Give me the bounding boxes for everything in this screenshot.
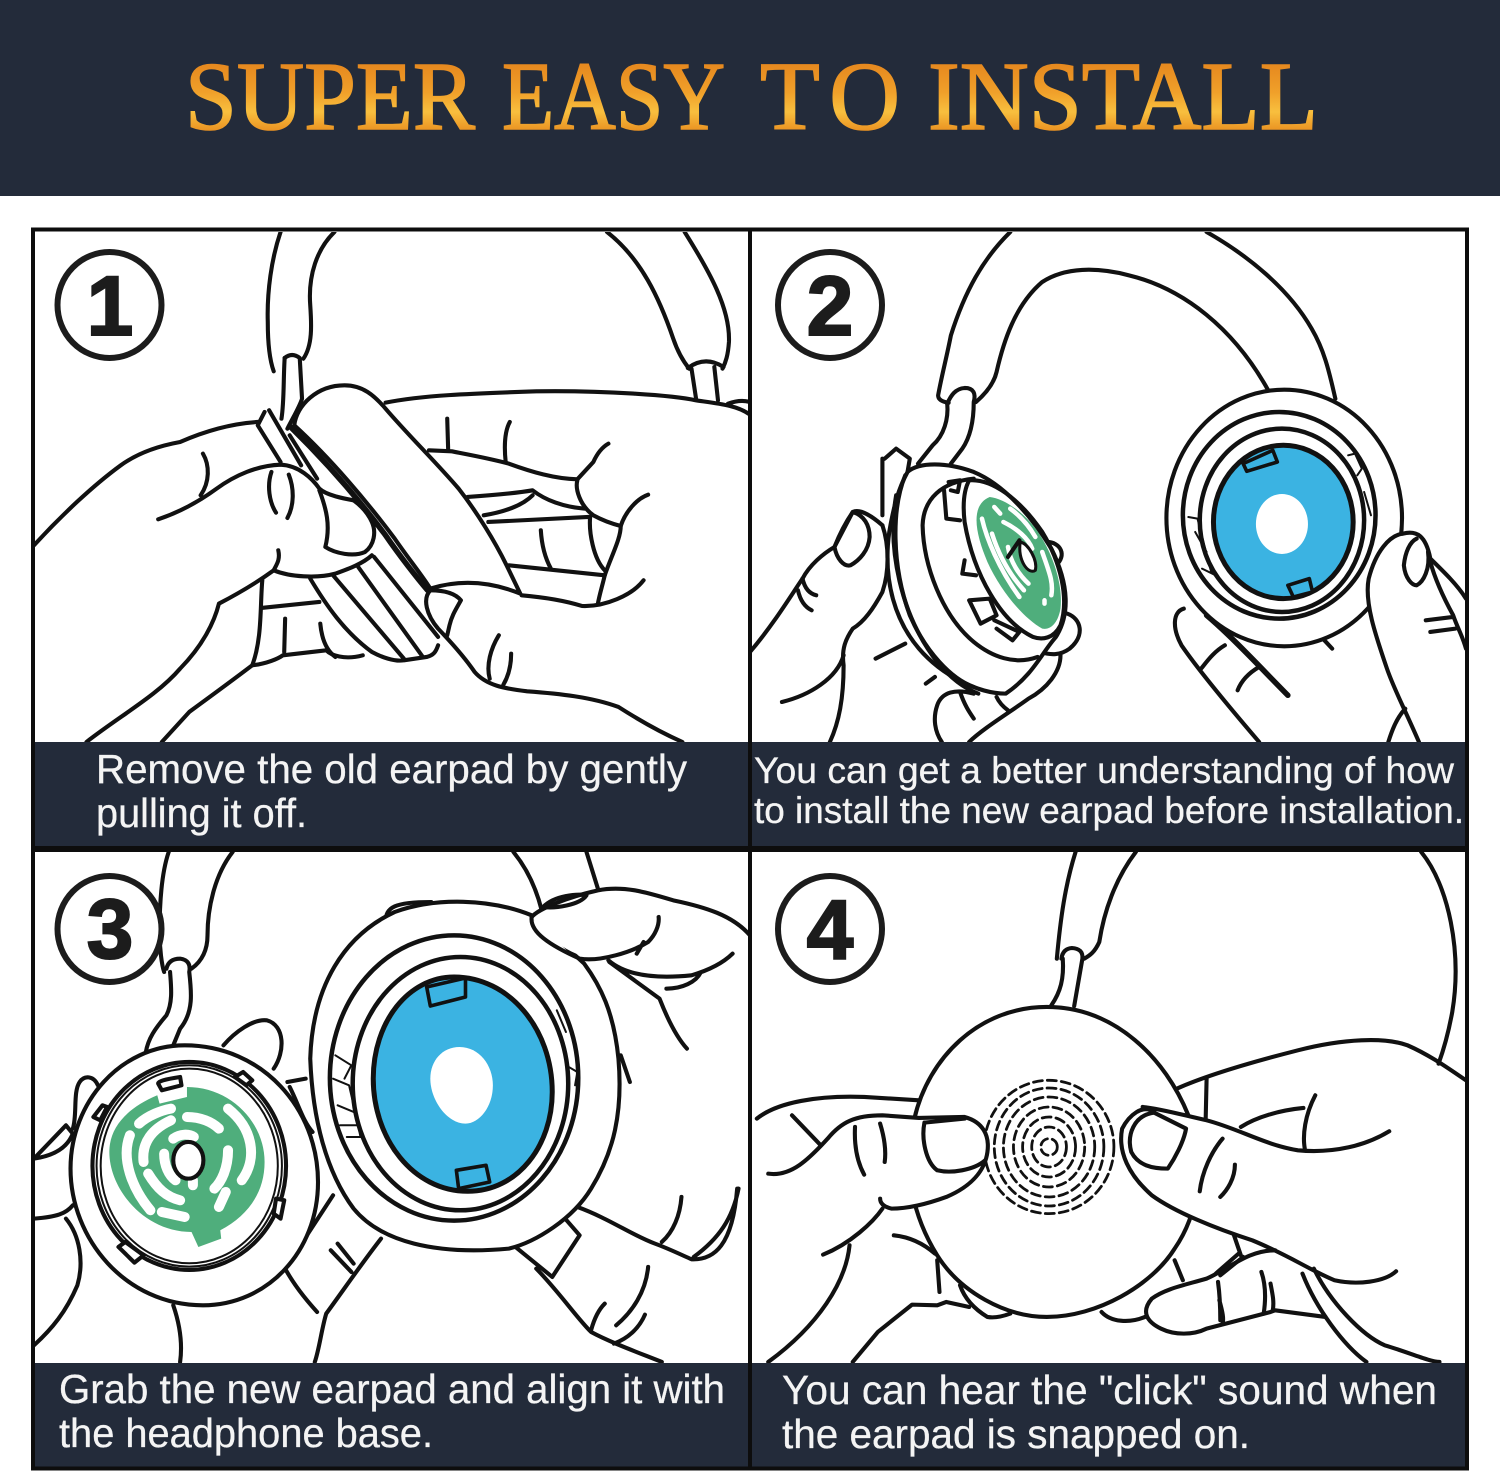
dashed speaker mesh xyxy=(984,1080,1114,1214)
step number 1 xyxy=(58,252,162,358)
step number 2: 2 xyxy=(807,259,853,353)
title: TO xyxy=(760,43,900,151)
title: SUPER xyxy=(185,43,476,151)
title: EASY xyxy=(502,43,725,151)
caption 4: the earpad is snapped on. xyxy=(782,1411,1250,1457)
headphone base with green pattern xyxy=(71,1045,318,1305)
earpad rings with blue adhesive xyxy=(310,902,620,1250)
earpad rings with blue adhesive xyxy=(1166,390,1402,646)
caption 2 xyxy=(751,742,1466,846)
illustration: pulling earpad off xyxy=(34,232,750,742)
illustration: aligning earpad with base xyxy=(34,852,750,1362)
panel 4: snap on xyxy=(751,852,1466,1467)
header banner xyxy=(0,0,1500,196)
step number 4 xyxy=(778,876,882,982)
illustration: earpad and headphone base xyxy=(750,232,1466,742)
illustration: pressing earpad until click xyxy=(757,852,1466,1362)
step number 1: 1 xyxy=(87,259,133,353)
step number 3: 3 xyxy=(87,882,133,976)
caption 4: You can hear the "click" sound when xyxy=(782,1367,1437,1413)
caption 2: to install the new earpad before installation. xyxy=(754,790,1464,831)
step number 2 xyxy=(778,252,882,358)
panel 1: remove old earpad xyxy=(34,232,750,846)
caption 2: You can get a better understanding of how xyxy=(754,750,1454,791)
caption 1 xyxy=(34,742,749,846)
caption 3 xyxy=(34,1363,749,1467)
earpad outer shell xyxy=(909,1007,1198,1317)
caption 4 xyxy=(751,1363,1466,1467)
panel 2: understand installation xyxy=(750,232,1466,846)
caption 1: pulling it off. xyxy=(96,790,307,836)
caption 3: the headphone base. xyxy=(59,1410,433,1456)
green adhesive pattern xyxy=(977,497,1061,629)
panel 3: align new earpad xyxy=(34,852,750,1467)
caption 1: Remove the old earpad by gently xyxy=(96,746,687,792)
step number 4: 4 xyxy=(807,883,854,977)
title: INSTALL xyxy=(928,43,1318,151)
step number 3 xyxy=(58,876,162,982)
caption 3: Grab the new earpad and align it with xyxy=(59,1366,725,1412)
title xyxy=(185,43,1318,151)
